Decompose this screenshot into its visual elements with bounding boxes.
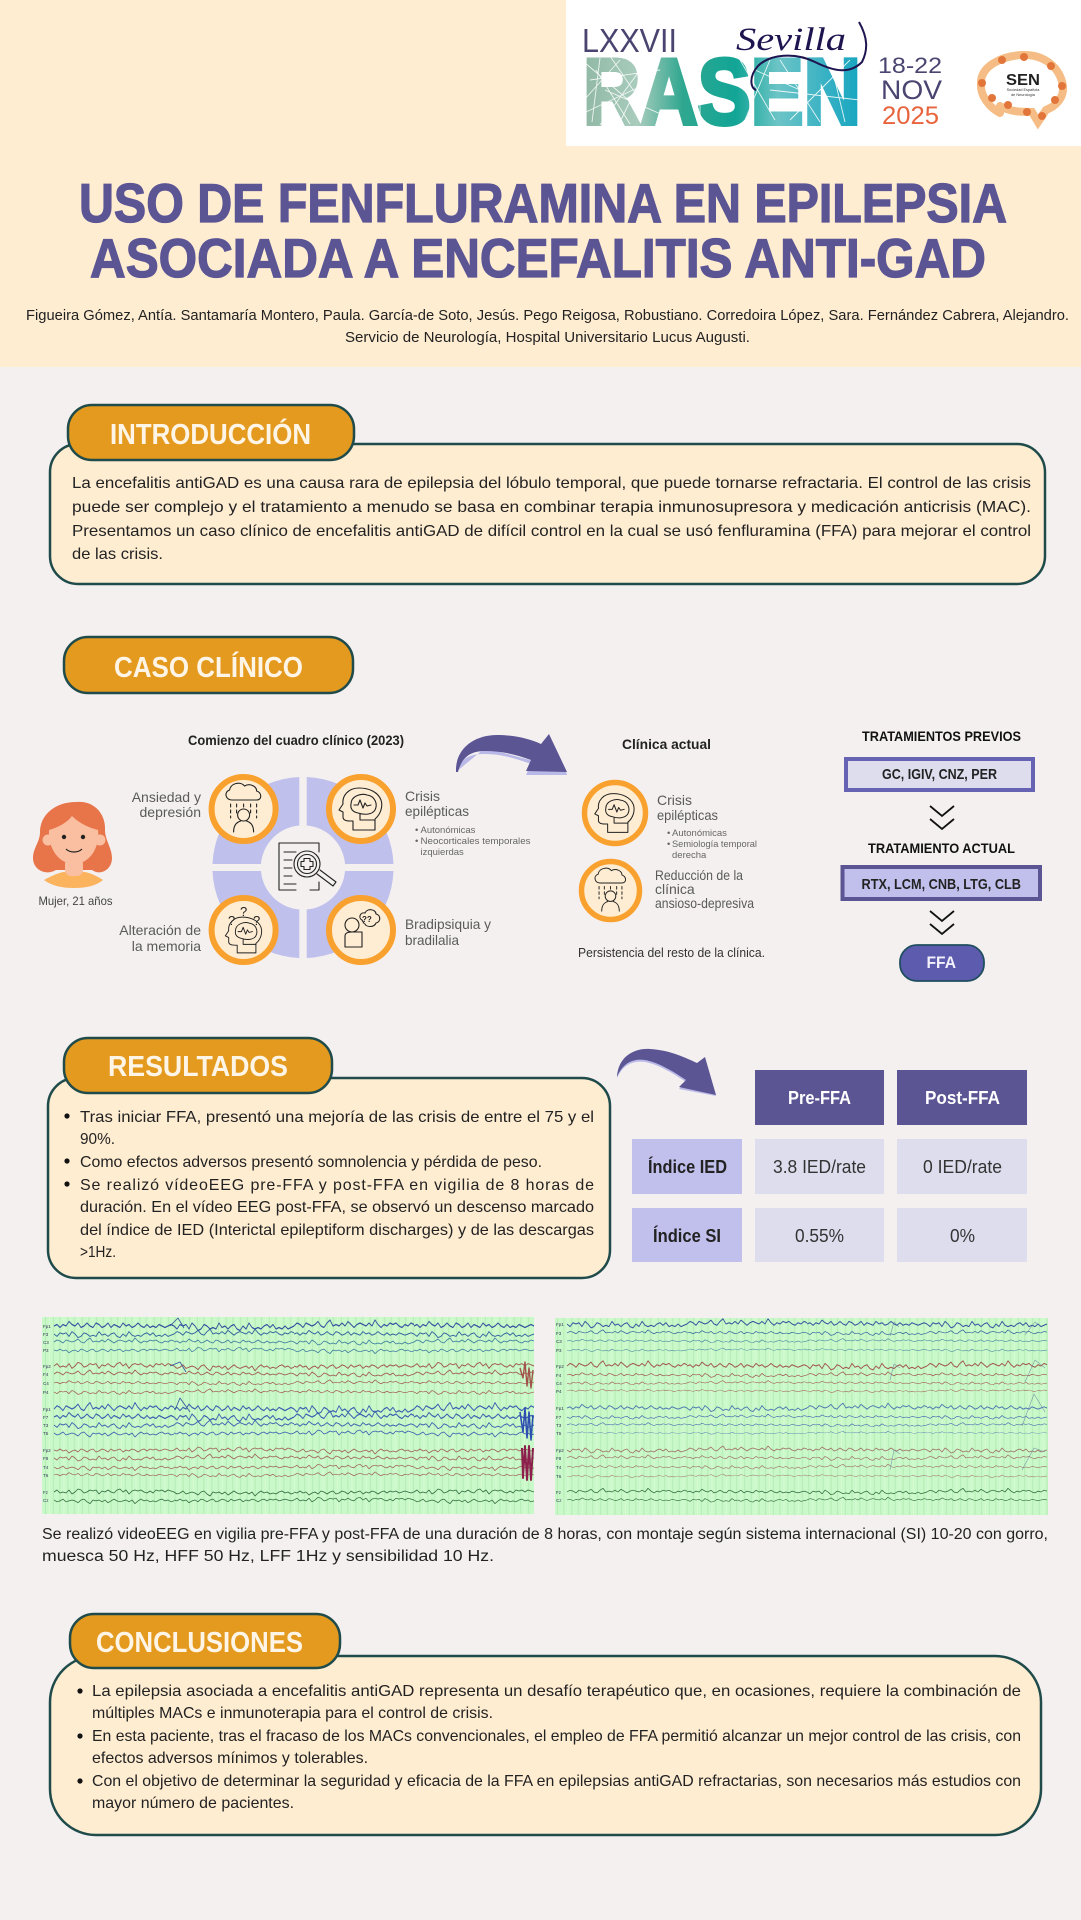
persistence note: Persistencia del resto de la clínica. <box>578 946 765 960</box>
labels: onset symptoms: Autonómicas <box>420 825 476 836</box>
icon circle: crisis epilépticas <box>329 777 393 841</box>
chart: EEG pre-FFA: Fp1 <box>43 1407 51 1412</box>
labels: current symptoms: epilépticas <box>657 807 718 823</box>
logo: SEN brain: SEN <box>1006 72 1040 89</box>
chart: EEG pre-FFA: Cz <box>43 1498 49 1503</box>
icon circle: alteración de la memoria: ? <box>253 913 260 928</box>
labels: current symptoms: clínica <box>655 881 695 897</box>
logo: SEN brain: de Neurología <box>1011 93 1036 97</box>
chart: EEG pre-FFA: Fz <box>43 1490 49 1495</box>
box: current treatment: RTX, LCM, CNB, LTG, CLB <box>862 876 1021 893</box>
table row: índice SI: Índice SI <box>653 1225 721 1246</box>
icon: medical record with magnifier <box>279 843 336 890</box>
labels: onset symptoms: • <box>415 836 418 847</box>
chart: EEG post-FFA: T4 <box>556 1465 562 1470</box>
logo: LXXVII Reunión RASEN Sevilla: LXXVII <box>582 22 677 59</box>
icon circle: ansiedad y depresión <box>212 777 276 841</box>
heading: tratamientos previos: TRATAMIENTOS PREVIOS <box>862 728 1021 744</box>
chart: EEG post-FFA: Fp2 <box>556 1364 564 1369</box>
heading: resultados <box>64 1038 332 1093</box>
introduction text: puede ser complejo y el tratamiento a menudo se basa en combinar terapia inmunosupresora y medicación anticrisis (MAC). <box>72 499 1031 516</box>
logo: LXXVII Reunión RASEN Sevilla: 18-22 <box>878 53 942 78</box>
EEG caption: Se realizó videoEEG en vigilia pre-FFA y post-FFA de una duración de 8 horas, con montaje según sistema internacional (SI) 10-20 con gorro, <box>42 1526 1048 1543</box>
chart: EEG pre-FFA: P3 <box>43 1348 49 1353</box>
chart: EEG post-FFA: P3 <box>556 1348 562 1353</box>
conclusions list: En esta paciente, tras el fracaso de los MACs convencionales, el empleo de FFA permitió alcanzar un mejor control de las crisis, con <box>92 1728 1021 1745</box>
box: previous treatments: GC, IGIV, CNZ, PER <box>882 766 997 783</box>
heading: introducción: INTRODUCCIÓN <box>110 417 311 451</box>
conclusions list: múltiples MACs e inmunoterapia para el control de crisis. <box>92 1705 493 1722</box>
logo: LXXVII Reunión RASEN Sevilla: 2025 <box>882 102 939 130</box>
labels: onset symptoms: depresión <box>140 804 201 820</box>
chart: EEG pre-FFA: P4 <box>43 1390 49 1395</box>
pill: FFA: FFA <box>926 953 956 972</box>
chart: EEG pre-FFA: T3 <box>43 1423 49 1428</box>
introduction text <box>72 475 1031 563</box>
table row: índice IED: 0 IED/rate <box>923 1157 1002 1177</box>
labels: onset symptoms: epilépticas <box>405 803 469 819</box>
conclusions list: La epilepsia asociada a encefalitis antiGAD representa un desafío terapéutico que, en ocasiones, requiere la combinación de <box>92 1683 1021 1700</box>
labels: current symptoms: Autonómicas <box>672 828 727 839</box>
table: pre and post FFA <box>632 1070 1027 1262</box>
arrow: chevrons down <box>930 806 954 829</box>
chart: EEG pre-FFA: Fp2 <box>43 1448 51 1453</box>
chart: EEG post-FFA: C3 <box>556 1339 562 1344</box>
labels: current symptoms: Crisis <box>657 792 692 808</box>
logo: SEN brain <box>978 53 1066 122</box>
title <box>79 172 1007 289</box>
icon circle: crisis actual <box>584 782 646 844</box>
table header row <box>755 1070 1027 1125</box>
introduction text: La encefalitis antiGAD es una causa rara de epilepsia del lóbulo temporal, que puede tornarse refractaria. El control de las crisis <box>72 475 1031 492</box>
treatment flow <box>842 728 1040 981</box>
icon circle: bradipsiquia y bradilalia: ?? <box>362 915 372 924</box>
authors and affiliation: Figueira Gómez, Antía. Santamaría Montero, Paula. García-de Soto, Jesús. Pego Reigosa, Robustiano. Corredoira López, Sara. Fernández Cabrera, Alejandro. <box>26 308 1069 324</box>
results list: >1Hz. <box>80 1244 116 1261</box>
chart: EEG pre-FFA <box>42 1317 534 1514</box>
results list: Tras iniciar FFA, presentó una mejoría de las crisis de entre el 75 y el <box>80 1109 594 1126</box>
icon circle: alteración de la memoria: ? <box>228 913 235 928</box>
conclusions list <box>77 1683 1021 1812</box>
icon circle: alteración de la memoria: ? <box>240 904 247 919</box>
chart: EEG pre-FFA: F4 <box>43 1372 49 1377</box>
table row: índice IED <box>632 1139 1027 1194</box>
patient figure <box>33 802 112 908</box>
results list: Se realizó vídeoEEG pre-FFA y post-FFA en vigilia de 8 horas de <box>80 1177 594 1194</box>
conclusions list: Con el objetivo de determinar la seguridad y eficacia de la FFA en epilepsias antiGAD refractarias, son necesarios más estudios con <box>92 1773 1021 1790</box>
heading: conclusiones: CONCLUSIONES <box>96 1627 303 1659</box>
labels: onset symptoms: la memoria <box>132 938 201 954</box>
labels: onset symptoms: Alteración de <box>119 922 201 938</box>
authors and affiliation: Servicio de Neurología, Hospital Universitario Lucus Augusti. <box>345 330 750 346</box>
arrow: onset to current <box>456 734 567 775</box>
results list: 90%. <box>80 1131 115 1148</box>
panel: conclusiones <box>50 1614 1041 1835</box>
chart: EEG post-FFA: T6 <box>556 1474 562 1479</box>
introduction text: Presentamos un caso clínico de encefalitis antiGAD de difícil control en la cual se usó fenfluramina (FFA) para mejorar el control <box>72 523 1031 540</box>
icon circle: reducción ansioso-depresiva <box>582 862 640 920</box>
heading: resultados: RESULTADOS <box>108 1051 288 1083</box>
conclusions list: efectos adversos mínimos y tolerables. <box>92 1750 368 1767</box>
labels: onset symptoms: izquierdas <box>420 847 464 858</box>
chart: EEG post-FFA: F8 <box>556 1456 562 1461</box>
labels: onset symptoms: bradilalia <box>405 932 459 948</box>
arrow: results to table <box>617 1049 716 1096</box>
box: previous treatments <box>846 759 1033 790</box>
results list: Como efectos adversos presentó somnolencia y pérdida de peso. <box>80 1154 542 1171</box>
chart: EEG pre-FFA: T6 <box>43 1473 49 1478</box>
heading: caso clínico: CASO CLÍNICO <box>114 650 303 684</box>
icon circle: alteración de la memoria <box>212 898 276 962</box>
logo: LXXVII Reunión RASEN Sevilla: RASEN <box>583 39 861 144</box>
diagram: clinical onset quadrants <box>212 777 394 962</box>
table row: índice IED: Índice IED <box>648 1156 727 1177</box>
patient figure: Mujer, 21 años <box>38 894 112 908</box>
heading: comienzo del cuadro clínico: Comienzo del cuadro clínico (2023) <box>188 732 404 748</box>
box: current treatment <box>842 867 1040 899</box>
labels: onset symptoms: Ansiedad y <box>132 789 201 805</box>
chart: EEG post-FFA: Cz <box>556 1498 562 1503</box>
chart: EEG pre-FFA: F3 <box>43 1332 49 1337</box>
table header row: Post-FFA <box>925 1088 1000 1108</box>
logo: SEN brain: Sociedad Española <box>1007 88 1040 92</box>
labels: onset symptoms: Neocorticales temporales <box>420 836 531 847</box>
heading: clínica actual: Clínica actual <box>622 736 711 752</box>
chart: EEG post-FFA: Fp1 <box>556 1322 564 1327</box>
table row: índice IED: 3.8 IED/rate <box>773 1157 866 1177</box>
chart: EEG post-FFA: C4 <box>556 1381 562 1386</box>
authors and affiliation <box>26 308 1069 346</box>
labels: onset symptoms <box>119 788 531 954</box>
EEG caption <box>42 1526 1048 1565</box>
results list <box>64 1109 594 1261</box>
chart: EEG post-FFA: P4 <box>556 1389 562 1394</box>
chart: EEG pre-FFA: Fp2 <box>43 1364 51 1369</box>
labels: current symptoms: • <box>667 828 670 839</box>
conclusions list: mayor número de pacientes. <box>92 1795 294 1812</box>
labels: current symptoms: Reducción de la <box>655 867 743 883</box>
introduction text: de las crisis. <box>72 546 163 563</box>
table row: índice SI: 0% <box>950 1226 975 1246</box>
results list: duración. En el vídeo EEG post-FFA, se observó un descenso marcado <box>80 1199 594 1216</box>
header band <box>0 0 1081 367</box>
labels: current symptoms: ansioso-depresiva <box>655 895 754 911</box>
chart: EEG post-FFA: T5 <box>556 1431 562 1436</box>
labels: onset symptoms: • <box>415 825 418 836</box>
labels: current symptoms: derecha <box>672 850 707 861</box>
chart: EEG pre-FFA: F7 <box>43 1415 49 1420</box>
chart: EEG pre-FFA: Fp1 <box>43 1324 51 1329</box>
chart: EEG post-FFA: Fp1 <box>556 1406 564 1411</box>
labels: current symptoms: Semiología temporal <box>672 839 757 850</box>
logo panel: congress and society <box>566 0 1081 146</box>
panel: resultados <box>48 1038 610 1278</box>
logo: LXXVII Reunión RASEN Sevilla: NOV <box>881 75 942 105</box>
chart: EEG post-FFA: F3 <box>556 1331 562 1336</box>
logo: LXXVII Reunión RASEN Sevilla: Sevilla <box>736 22 846 58</box>
heading: caso clínico <box>64 637 353 693</box>
heading: introducción <box>68 405 354 460</box>
chart: EEG post-FFA: T3 <box>556 1423 562 1428</box>
chart: EEG post-FFA <box>555 1318 1048 1515</box>
title: ASOCIADA A ENCEFALITIS ANTI-GAD <box>90 227 986 289</box>
chart: EEG post-FFA: F7 <box>556 1415 562 1420</box>
chart: EEG pre-FFA: T5 <box>43 1431 49 1436</box>
panel: introducción <box>50 405 1045 584</box>
chart: EEG pre-FFA: C3 <box>43 1340 49 1345</box>
chart: EEG pre-FFA: T4 <box>43 1465 49 1470</box>
arrow: chevrons down <box>930 911 954 934</box>
chart: EEG pre-FFA: F8 <box>43 1456 49 1461</box>
table header row: Pre-FFA <box>788 1088 851 1108</box>
EEG caption: muesca 50 Hz, HFF 50 Hz, LFF 1Hz y sensibilidad 10 Hz. <box>42 1548 494 1565</box>
table row: índice SI: 0.55% <box>795 1226 844 1246</box>
chart: EEG post-FFA: Fp2 <box>556 1448 564 1453</box>
heading: tratamiento actual: TRATAMIENTO ACTUAL <box>868 840 1015 856</box>
labels: current symptoms: • <box>667 839 670 850</box>
chart: EEG post-FFA: F4 <box>556 1373 562 1378</box>
chart: EEG pre-FFA: C4 <box>43 1381 49 1386</box>
labels: current symptoms <box>655 792 757 911</box>
icon circle: bradipsiquia y bradilalia <box>329 898 393 962</box>
heading: conclusiones <box>70 1614 340 1668</box>
pill: FFA <box>900 945 984 981</box>
chart: EEG post-FFA: Fz <box>556 1490 562 1495</box>
labels: onset symptoms: Crisis <box>405 788 440 804</box>
results list: del índice de IED (Interictal epileptiform discharges) y de las descargas <box>80 1222 594 1239</box>
labels: onset symptoms: Bradipsiquia y <box>405 916 491 932</box>
table row: índice SI <box>632 1208 1027 1262</box>
